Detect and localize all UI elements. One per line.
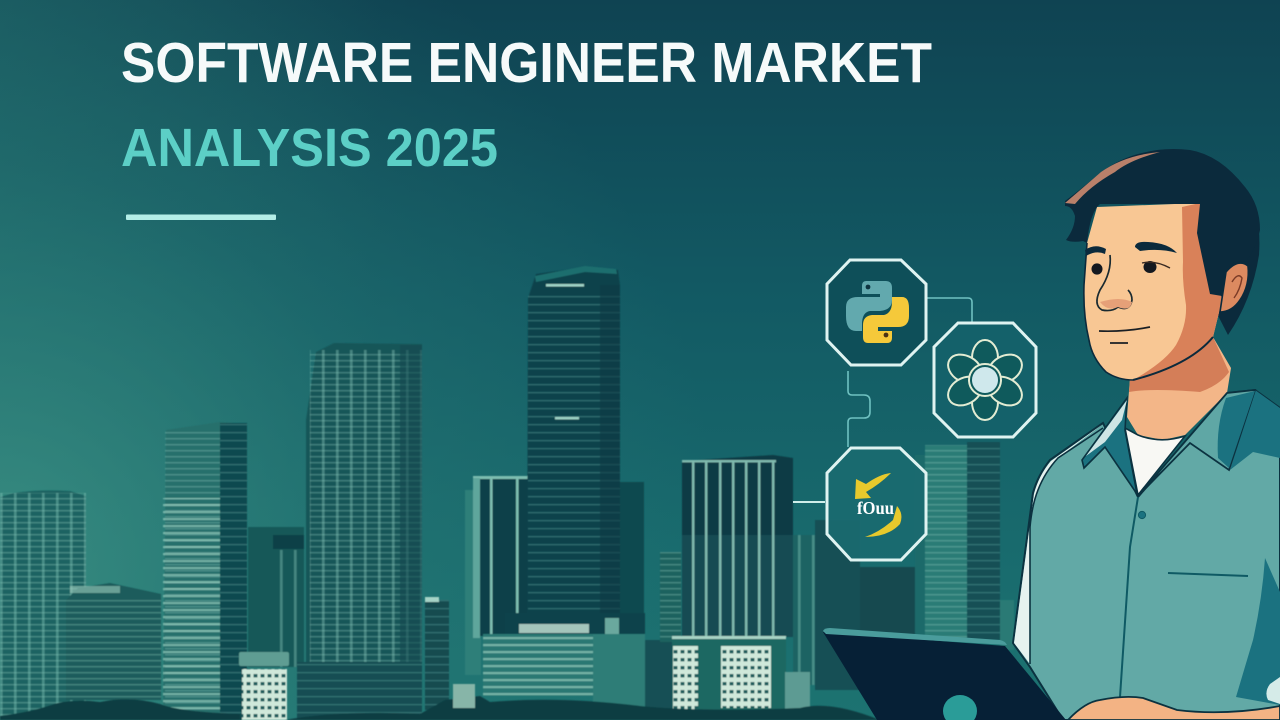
hair	[1065, 149, 1260, 296]
city skyline	[0, 266, 1014, 720]
small dark tower	[425, 597, 449, 710]
foreground trees	[0, 684, 880, 720]
hair highlight	[1065, 152, 1160, 204]
icon: atom badge	[934, 323, 1036, 437]
slim left annex	[465, 476, 528, 675]
left cylinder tower	[0, 490, 86, 720]
shirt shadow right	[1230, 390, 1280, 705]
small tower behind	[660, 552, 681, 642]
icon: python badge	[827, 260, 926, 365]
laptop logo	[943, 695, 977, 720]
tower podium	[297, 662, 422, 720]
cuff	[1266, 677, 1280, 704]
main dark tower	[527, 266, 620, 615]
shirt body	[1013, 390, 1280, 720]
mid tower with dark side	[163, 422, 247, 720]
neck	[1127, 337, 1231, 440]
laptop	[823, 628, 1066, 720]
ear	[1220, 263, 1248, 312]
black column building	[682, 455, 793, 638]
right collar	[1138, 390, 1255, 496]
title	[121, 31, 932, 178]
side tower	[620, 482, 644, 632]
icon: code arrows badge	[827, 448, 926, 560]
building behind	[248, 527, 304, 667]
title line one: SOFTWARE ENGINEER MARKET	[121, 31, 932, 95]
eyebrows	[1085, 242, 1177, 256]
face	[1084, 203, 1222, 380]
small white building	[239, 652, 289, 720]
shirt sleeve highlight	[1014, 424, 1103, 664]
tall striped tower	[306, 343, 422, 665]
eyes	[1092, 261, 1156, 275]
lattice base	[672, 636, 810, 714]
title underline rule	[126, 214, 276, 220]
low wide building	[66, 583, 161, 700]
placket line	[1120, 497, 1138, 697]
nose	[1097, 255, 1132, 311]
hand	[1068, 697, 1280, 720]
hair back	[1200, 187, 1259, 335]
face shadow	[1133, 203, 1222, 380]
engineer figure	[1013, 149, 1280, 720]
python blue snake	[846, 281, 892, 331]
left collar	[1082, 398, 1137, 494]
mouth	[1099, 327, 1150, 343]
python yellow snake	[863, 297, 909, 343]
connector lines	[793, 298, 972, 502]
far right buildings	[793, 442, 1014, 690]
button	[1138, 511, 1146, 519]
title line two: ANALYSIS 2025	[121, 118, 498, 178]
pocket line	[1168, 573, 1248, 576]
tower base with stripes	[483, 613, 673, 720]
white t-shirt	[1125, 428, 1185, 495]
icon: code arrows badge: fOuu	[857, 498, 894, 518]
